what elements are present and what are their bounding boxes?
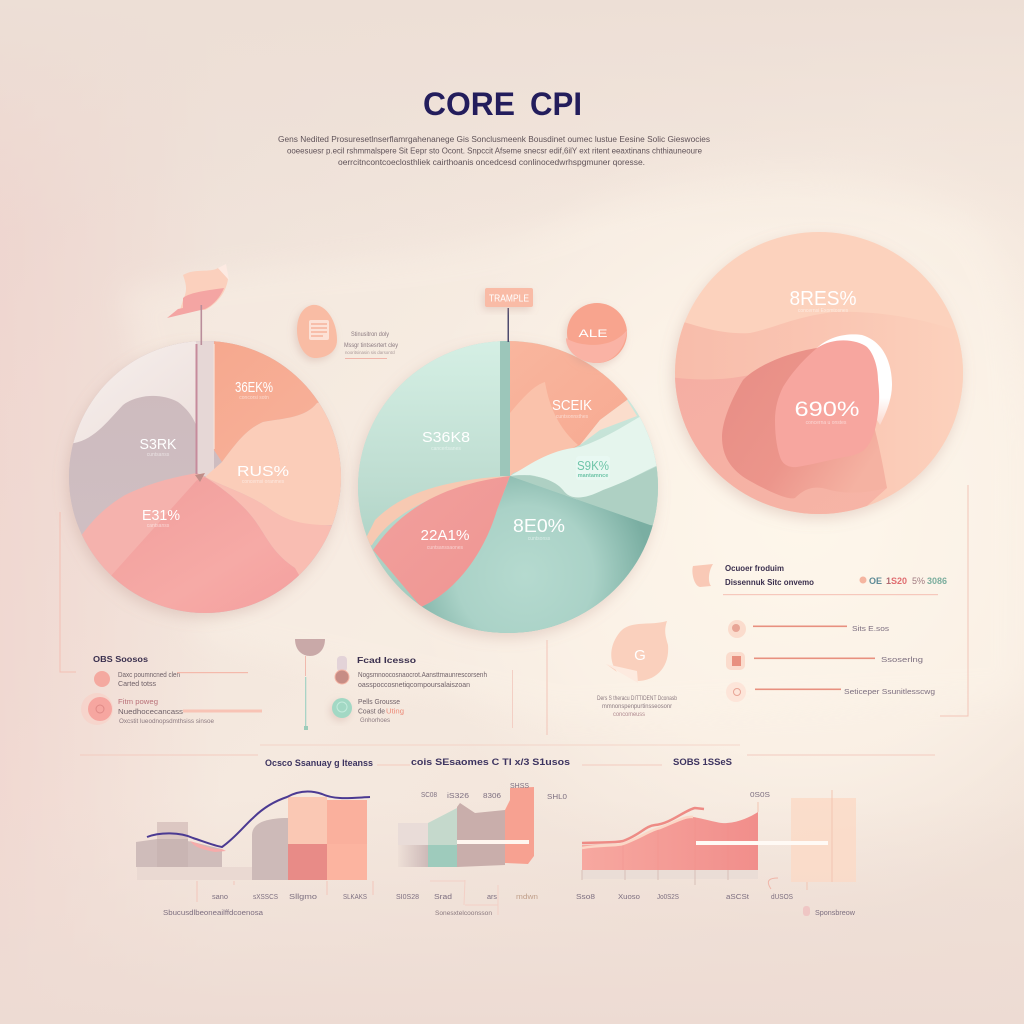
panel: pie chart 2: cuntsonss: [528, 536, 551, 542]
intro text block: Gens Nedited Prosuresetlnserflamrgahenanege Gis Sonclusmeenk Bousdinet oumec lustue Eesine Solic Gieswocies: [278, 135, 710, 144]
icon: capsule: [335, 656, 349, 684]
chart 2: stacked area: iS326: [447, 793, 469, 800]
chart 1: line and bars: [136, 792, 373, 917]
title: [423, 86, 582, 122]
callout text: badge caption: Mssgr tintsesrtert cley: [344, 342, 399, 349]
legend: middle column: Nogsmnoocosnaocrot.Aansttmaunrescorsenh: [358, 670, 487, 679]
axis labels: sano: [212, 894, 228, 901]
heading: left legend: OBS Soosos: [93, 654, 148, 664]
row: item 3: Seticeper Ssunitlesscwg: [844, 689, 935, 696]
value strip: [860, 576, 947, 586]
label: pie 3 blob value: 690%: [794, 398, 860, 421]
tag: pie 2 flag: [485, 288, 533, 307]
label: pie 2 mint value: [576, 456, 610, 480]
panel: pie chart 1: concernsi oranmes: [242, 479, 285, 485]
icon: mint circle: [332, 698, 352, 718]
chart 3: area chart: [547, 790, 856, 917]
icon: leaf with caption: concomeuss: [613, 711, 646, 718]
axis labels: Sllgmo: [289, 894, 317, 901]
legend: right header: Dissennuk Sitc onvemo: [725, 577, 814, 587]
callout text: badge caption: Stinusitron doly: [351, 331, 390, 338]
badge: circle on pie 2: [566, 303, 627, 363]
chart 3: area chart: dUSOS: [771, 894, 793, 901]
legend: middle column: [332, 655, 513, 728]
chart 2: stacked area: Srad: [434, 894, 452, 901]
value strip: 3086: [927, 576, 947, 586]
chart 3: area chart: Jo0S2S: [657, 894, 679, 901]
chart 2: stacked area: ars: [487, 894, 498, 901]
chart heading 3: SOBS 1SSeS: [673, 757, 732, 768]
icon: leaf with caption: mmnonspenpurtinsseosonr: [602, 703, 673, 710]
icon: peach tab: [692, 564, 713, 587]
label: pie 2 left value: S36K8: [422, 429, 470, 446]
chart 2: stacked area: mdwn: [516, 894, 538, 901]
row: item 1: [728, 620, 890, 638]
callout text: badge caption: [344, 331, 399, 359]
badge: circle on pie 2: ALE: [578, 328, 608, 340]
legend: left column: Nuedhocecancass: [118, 707, 183, 716]
section rule: [80, 755, 935, 765]
panel: pie chart 3: concerna u onstes: [806, 420, 847, 426]
chart 3: area chart: aSCSt: [726, 894, 749, 901]
panel: pie chart 3: concernsi Exomtosnes: [798, 308, 849, 314]
icon: cup and connector: [295, 639, 325, 730]
chart 2: stacked area: SC08: [421, 792, 437, 799]
legend: left column: Fitm poweg: [118, 697, 158, 706]
panel: pie chart 1: cantsanss: [147, 523, 170, 529]
value strip: OE: [869, 576, 882, 586]
panel: pie chart 1: cuntsanss: [147, 452, 170, 458]
title: CPI: [530, 86, 582, 122]
panel: pie chart 1: [60, 340, 350, 620]
value strip: 5%: [912, 576, 925, 586]
chart 3: area chart: Sso8: [576, 894, 595, 901]
frame line: left bracket: [60, 512, 76, 672]
legend: right header: [692, 563, 947, 595]
chart heading 1: Ocsco Ssanuay g Iteanss: [265, 758, 373, 769]
chart 3: area chart: 0S0S: [750, 792, 770, 799]
frame line: right panel: [260, 485, 968, 745]
tag: pie 2 flag: TRAMPLE: [489, 294, 529, 304]
icon: small tag: [803, 906, 810, 916]
panel: pie chart 1: concorsi sotn: [239, 395, 269, 401]
legend: left column: Daxc poumncned clen: [118, 670, 180, 679]
row: item 2: [726, 652, 923, 670]
title: CORE: [423, 86, 515, 122]
icon: large pink circle: [81, 693, 113, 725]
chart heading 2: cois SEsaomes C Tl x/3 S1usos: [411, 757, 570, 768]
chart 3: area chart: Xuoso: [618, 894, 640, 901]
panel: pie chart 3: [670, 232, 970, 530]
row: item 2: Ssoserlng: [881, 657, 923, 664]
panel: pie chart 2: cuntsonnsthes: [556, 414, 589, 420]
intro text block: ooeesuesr p.ecil rshmmalspere Sit Eepr sto Ocont. Snpccit Afseme snecsr edif,6ilY ext ritent eeaxtinans chthiauneoure: [287, 146, 703, 156]
value strip: S20: [891, 576, 907, 586]
panel: pie chart 2: [350, 308, 670, 640]
label: pie 3 top value: 8RES%: [790, 288, 857, 310]
chart 2: stacked area: 8306: [483, 793, 501, 800]
panel: pie chart 2: cancertsanes: [431, 446, 461, 452]
legend: left column: Oxcstit lueodnopsdmthsiss sinsoe: [119, 718, 214, 725]
intro text block: oerrcitncontcoeclosthliek cairthoanis oncedcesd conlinocedwrhspgmuner qoresse.: [338, 158, 645, 167]
icon: leaf with caption: Ders S theracu DITTIDENT Dconasb: [597, 695, 677, 702]
legend: middle column: Pells Grousse: [358, 697, 400, 706]
legend: middle column: Coast de: [358, 706, 385, 716]
chart 2: stacked area: SI0S28: [396, 894, 419, 901]
chart 2: stacked area: [396, 783, 538, 917]
axis labels: sXSSCS: [253, 894, 278, 901]
chart 2: stacked area: SHSS: [510, 783, 529, 790]
chart 3: area chart: Sponsbreow: [815, 910, 856, 917]
label: pie 2 mint value: S9K%: [577, 458, 609, 473]
icon: small pink circle: [94, 671, 110, 687]
icon: document badge: [297, 305, 337, 358]
legend: middle column: Uting: [386, 706, 404, 716]
label: pie 1 top-right value: 36EK%: [235, 379, 273, 396]
label: pie 2 coral value: 22A1%: [420, 527, 470, 544]
heading: middle legend: Fcad Icesso: [357, 655, 416, 665]
icon: leaf with caption: G: [634, 647, 646, 664]
axis labels: SLKAKS: [343, 894, 367, 901]
value strip: 1: [886, 576, 891, 586]
chart 2: stacked area: Sonesxtelcoonsson: [435, 910, 492, 917]
legend: left column: Carted totss: [118, 679, 156, 688]
label: pie 2 upper right value: SCEIK: [552, 397, 592, 414]
legend: middle column: Gnhorhoes: [360, 717, 391, 724]
label: pie 2 teal value: 8E0%: [513, 516, 565, 536]
label: pie 1 left value: S3RK: [140, 436, 176, 453]
label: pie 1 right value: RUS%: [237, 463, 289, 480]
intro text block: [278, 135, 710, 167]
axis labels: [163, 894, 367, 917]
row: item 1: Sits E.sos: [852, 626, 890, 633]
axis labels: Sbucusdlbeoneailffdcoenosa: [163, 910, 263, 917]
legend: left column: [81, 654, 262, 725]
panel: pie chart 2: cuntsanssaones: [427, 545, 464, 551]
label: pie 2 mint value: mantamnce: [578, 473, 608, 479]
legend: right header: Ocuoer froduim: [725, 563, 784, 573]
icon: leaf with caption: [597, 621, 677, 718]
icon: bird flag on pie 1: [167, 264, 229, 345]
chart 3: area chart: SHL0: [547, 794, 567, 801]
legend: middle column: oasspoccosnetiqcompoursalaiszoan: [358, 680, 470, 689]
row: item 3: [726, 682, 935, 702]
callout text: badge caption: nooritsinasin sis darsontcl: [345, 350, 395, 355]
label: pie 1 lower value: E31%: [142, 507, 180, 524]
